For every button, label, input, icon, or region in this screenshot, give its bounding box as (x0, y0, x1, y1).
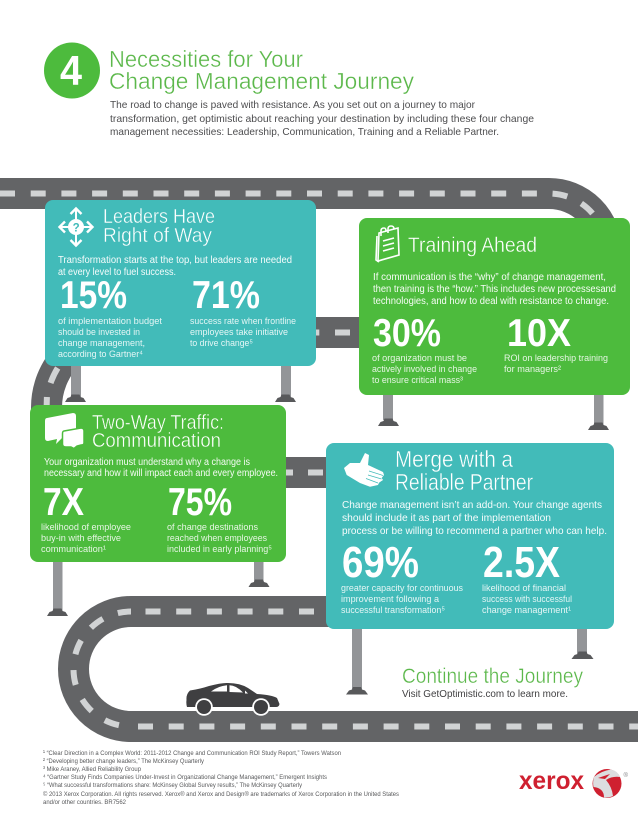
heading: Training Ahead (408, 234, 537, 257)
icon: four-way arrows: ? (73, 222, 80, 234)
footnotes: and/or other countries. BR7562 (43, 799, 126, 806)
car (186, 683, 280, 716)
heading: Reliable Partner (395, 469, 533, 495)
stat: 71% (190, 274, 296, 349)
continue the journey: Continue the Journey (402, 665, 583, 688)
continue the journey (402, 665, 583, 700)
stat: 69%: 69% (342, 538, 419, 587)
stat: 15%: change management, (58, 338, 145, 349)
text block: should include it as part of the implementation (342, 512, 551, 524)
panel: two-way traffic (30, 405, 286, 562)
stat: 71%: 71% (192, 274, 260, 317)
panel: leaders (45, 200, 316, 366)
stat: 71%: to drive change⁵ (190, 338, 253, 349)
text block (342, 499, 607, 537)
stat: 71%: employees take initiative (190, 327, 288, 338)
stat: 69%: greater capacity for continuous (341, 583, 463, 594)
title: Necessities for Your (109, 46, 303, 72)
stat: 7X: likelihood of employee (41, 522, 131, 533)
stat: 71%: success rate when frontline (190, 316, 296, 327)
text block (44, 457, 278, 479)
footnotes: © 2013 Xerox Corporation. All rights reserved. Xerox® and Xerox and Design® are trademarks of Xerox Corporation in the United States (43, 790, 400, 798)
stat: 7X: communication¹ (41, 544, 106, 555)
stat: 15%: should be invested in (58, 327, 140, 338)
text block: If communication is the “why” of change management, (373, 272, 606, 283)
text block: Change management isn’t an add-on. Your change agents (342, 499, 602, 511)
stat: 30%: actively involved in change (372, 364, 477, 375)
stat: 10X (504, 312, 608, 375)
footnotes: ³ Mike Araney, Allied Reliability Group (43, 766, 141, 773)
text block: Transformation starts at the top, but leaders are needed (58, 255, 292, 266)
footnotes: ¹ “Clear Direction in a Complex World: 2011-2012 Change and Communication ROI Study Report,” Towers Watson (43, 750, 341, 757)
number badge: 4 (44, 42, 100, 98)
stat: 2.5X (482, 538, 572, 616)
text block: then training is the “how.” This includes new processesand (373, 284, 616, 295)
stat: 30% (372, 312, 477, 386)
stat: 69%: improvement following a (341, 594, 440, 605)
stat: 75%: of change destinations (167, 522, 258, 533)
stat: 30%: 30% (373, 312, 441, 355)
text block: technologies, and how to deal with resistance to change. (373, 296, 609, 307)
heading: Communication (92, 430, 221, 452)
title (109, 46, 414, 94)
stat: 30%: to ensure critical mass³ (372, 375, 463, 386)
stat: 7X: buy-in with effective (41, 533, 121, 544)
stat: 75%: reached when employees (167, 533, 267, 544)
text block: at every level to fuel success. (58, 267, 176, 278)
stat: 75% (167, 481, 272, 555)
xerox logo (519, 767, 628, 798)
sign posts (47, 366, 609, 694)
stat: 10X: for managers² (504, 364, 561, 375)
intro text: The road to change is paved with resistance. As you set out on a journey to major (110, 99, 475, 111)
intro text: management necessities: Leadership, Communication, Training and a Reliable Partner. (110, 126, 499, 138)
stat: 7X (41, 481, 131, 555)
panel: training (359, 218, 630, 395)
stat: 2.5X: likelihood of financial (482, 583, 566, 594)
heading (92, 412, 224, 452)
heading (395, 446, 533, 495)
icon: four-way arrows (60, 208, 92, 246)
stat: 2.5X: change management¹ (482, 605, 571, 616)
title: Change Management Journey (109, 68, 414, 94)
xerox logo: ® (624, 772, 628, 779)
footnotes: ⁵ “What successful transformations share: McKinsey Global Survey results,” The McKinsey Quarterly (43, 782, 303, 789)
intro text (110, 99, 534, 138)
stat: 2.5X: 2.5X (483, 538, 560, 587)
text block (373, 272, 616, 307)
stat: 75%: included in early planning⁵ (167, 544, 272, 555)
footnotes: ² “Developing better change leaders,” The McKinsey Quarterly (43, 758, 205, 765)
stat: 10X: ROI on leadership training (504, 353, 608, 364)
heading: Merge with a (395, 446, 513, 472)
heading (103, 206, 215, 247)
heading: Leaders Have (103, 206, 215, 228)
stat: 69%: successful transformation⁵ (341, 605, 445, 616)
text block (58, 255, 292, 278)
panel: merge (326, 443, 614, 629)
heading: Right of Way (103, 225, 212, 247)
stat: 75%: 75% (168, 481, 232, 524)
stat: 10X: 10X (507, 312, 571, 355)
icon: notepad (376, 226, 399, 262)
stat: 15%: according to Gartner⁴ (58, 349, 143, 360)
text block: Your organization must understand why a change is (44, 457, 250, 468)
footnotes: ⁴ “Gartner Study Finds Companies Under-Invest in Organizational Change Management,” Emergent Insights (43, 774, 328, 781)
stat: 15% (58, 274, 162, 360)
text block: necessary and how it will impact each and every employee. (44, 468, 278, 479)
xerox logo: xerox (519, 767, 584, 795)
continue the journey: Visit GetOptimistic.com to learn more. (402, 688, 568, 700)
footnotes (43, 750, 400, 806)
stat: 69% (341, 538, 463, 616)
icon: speech bubbles (45, 413, 84, 448)
number badge: 4: 4 (60, 47, 83, 94)
text block: process or be willing to recommend a partner who can help. (342, 525, 607, 537)
intro text: transformation, get optimistic about reaching your destination by including these four change (110, 113, 534, 125)
stat: 7X: 7X (43, 481, 84, 524)
stat: 15%: 15% (60, 274, 127, 317)
heading: Two-Way Traffic: (92, 412, 224, 434)
icon: open hand (344, 453, 384, 487)
winding road (0, 194, 638, 726)
stat: 30%: of organization must be (372, 353, 467, 364)
stat: 2.5X: success with successful (482, 594, 572, 605)
stat: 15%: of implementation budget (58, 316, 162, 327)
